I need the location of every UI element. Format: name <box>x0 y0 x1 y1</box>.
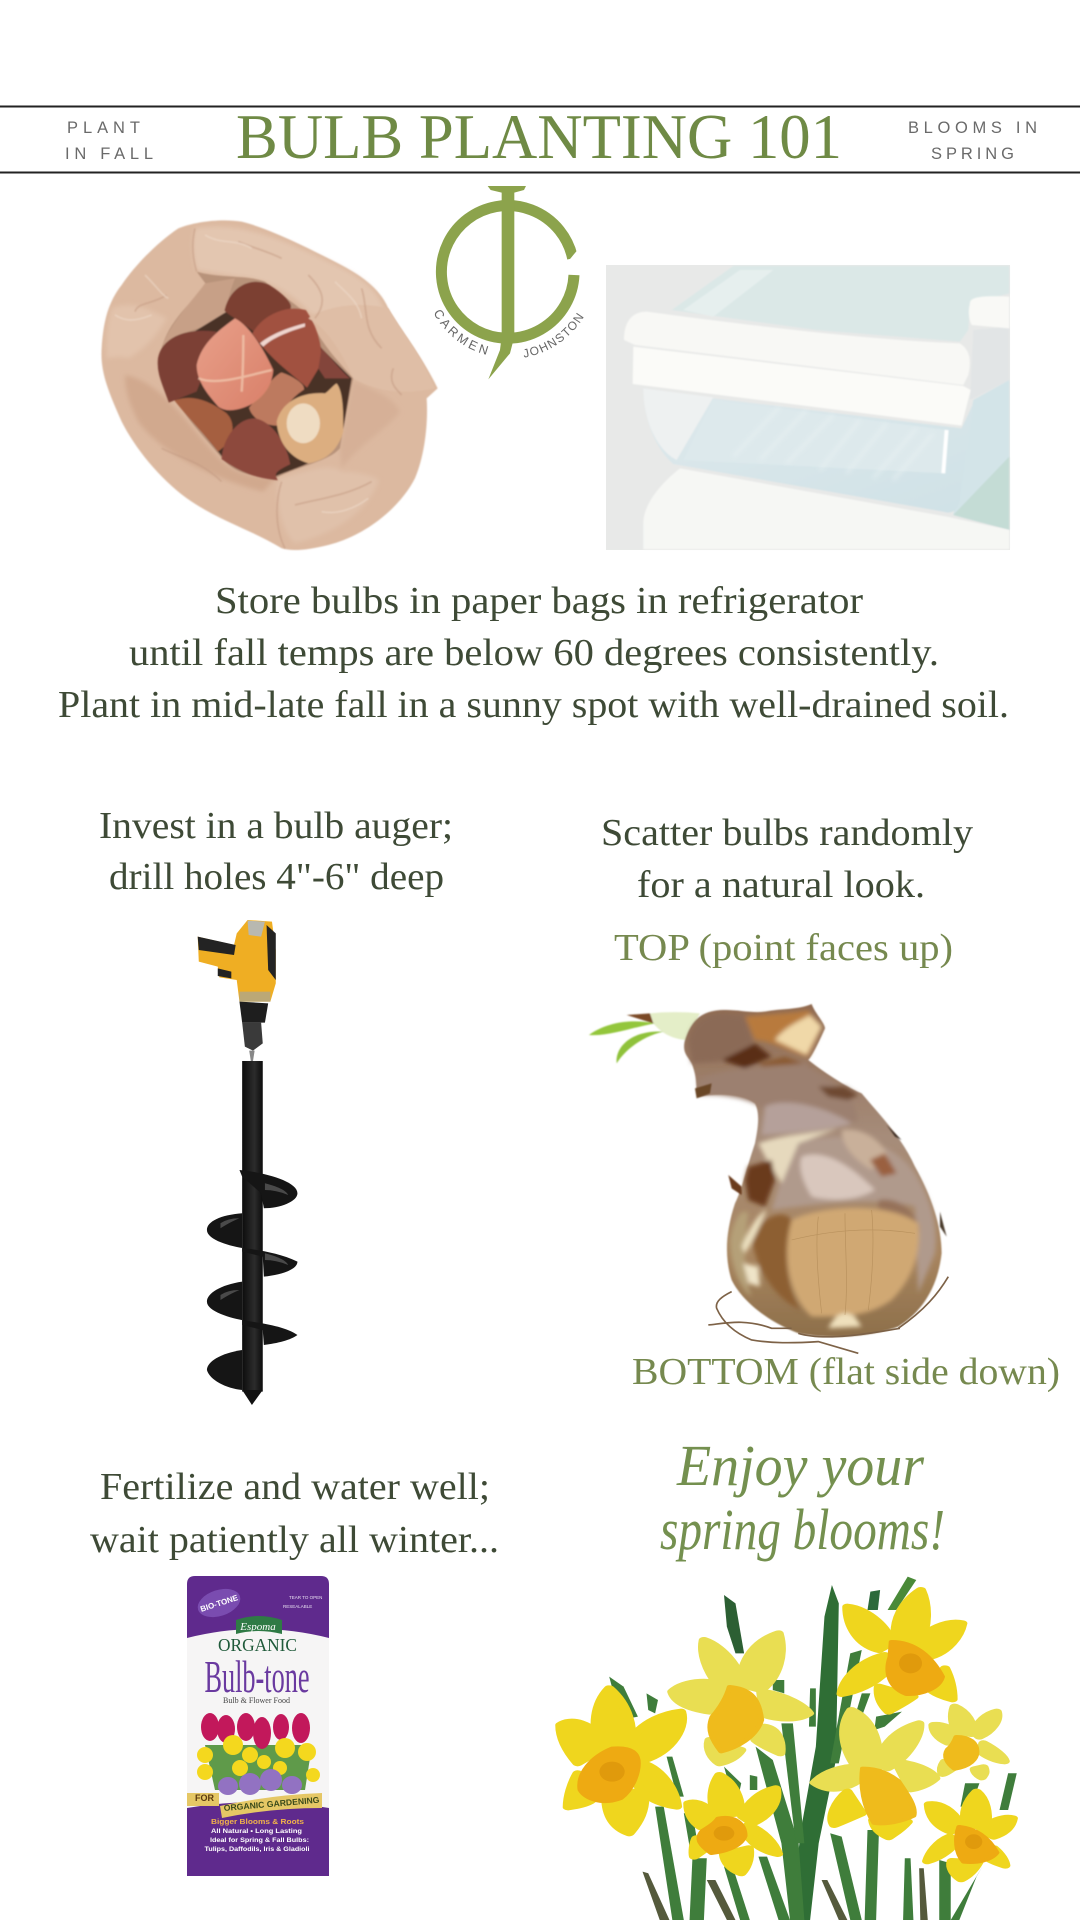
product name: ORGANIC <box>218 1635 297 1655</box>
paper flap <box>308 305 435 392</box>
photo: paper bag of bulbs <box>101 220 438 550</box>
auger instructions <box>99 805 453 898</box>
bag benefits: Bigger Blooms & Roots <box>211 1817 304 1826</box>
flower 4 <box>815 1710 935 1837</box>
brand shield <box>236 1616 282 1634</box>
photo: drill with bulb auger <box>198 920 297 1405</box>
bag banner <box>187 1793 322 1818</box>
bag banner: FOR <box>195 1793 214 1803</box>
flower 2 <box>672 1633 809 1763</box>
bag benefits: All Natural • Long Lasting <box>211 1828 302 1835</box>
logo: Carmen Johnston: CARMEN <box>434 310 488 355</box>
storage instructions: Store bulbs in paper bags in refrigerator <box>215 580 863 622</box>
badge: BIO-TONE <box>199 1593 240 1614</box>
left tagline <box>65 119 153 163</box>
right tagline: BLOOMS IN <box>908 119 1037 137</box>
auger instructions: drill holes 4"-6" deep <box>109 856 444 898</box>
bag banner: ORGANIC GARDENING <box>223 1795 320 1813</box>
reseal note: RESEALABLE <box>283 1604 312 1609</box>
brand shield: Espoma <box>239 1621 276 1633</box>
right tagline: SPRING <box>931 145 1014 163</box>
storage instructions <box>58 580 1009 726</box>
bag benefits: Tulips, Daffodils, Iris & Gladioli <box>204 1846 310 1853</box>
photo: refrigerator crisper drawer <box>606 265 1010 550</box>
product: Bulb-tone fertilizer bag: Bulb-tone <box>204 1651 310 1702</box>
script message: spring blooms! <box>660 1497 945 1562</box>
left tagline: IN FALL <box>65 145 153 163</box>
photo: daffodil bulb <box>589 1004 948 1353</box>
bag benefits: Ideal for Spring & Fall Bulbs: <box>210 1837 309 1844</box>
storage instructions: until fall temps are below 60 degrees consistently. <box>129 632 939 674</box>
storage instructions: Plant in mid-late fall in a sunny spot with well-drained soil. <box>58 684 1009 726</box>
title: BULB PLANTING 101 <box>236 101 842 172</box>
left tagline: PLANT <box>67 119 140 137</box>
photo: daffodils bouquet <box>560 1577 1017 1920</box>
bag benefits <box>204 1817 310 1853</box>
logo: Carmen Johnston: JOHNSTON <box>524 312 584 358</box>
scatter instructions: Scatter bulbs randomly <box>601 812 973 854</box>
scatter instructions <box>601 812 973 906</box>
flower 5 <box>934 1707 1005 1777</box>
fertilizer instructions: Fertilize and water well; <box>100 1466 490 1508</box>
script message <box>660 1433 945 1562</box>
flower 7 <box>927 1792 1013 1879</box>
scatter instructions: for a natural look. <box>637 864 925 906</box>
flower 3 <box>842 1590 962 1712</box>
reseal note: TEAR TO OPEN <box>289 1595 322 1600</box>
stems and leaves <box>609 1577 1017 1920</box>
reseal note <box>283 1595 322 1609</box>
auger instructions: Invest in a bulb auger; <box>99 805 453 847</box>
label: bulb bottom: BOTTOM (flat side down) <box>632 1351 1060 1393</box>
label: bulb top: TOP (point faces up) <box>614 927 953 969</box>
script message: Enjoy your <box>676 1433 924 1498</box>
product: Bulb-tone fertilizer bag <box>187 1576 329 1876</box>
bag flowers <box>197 1713 320 1795</box>
badge <box>194 1584 244 1622</box>
logo: Carmen Johnston <box>434 186 584 380</box>
fertilizer instructions: wait patiently all winter... <box>90 1519 499 1561</box>
bulbs <box>227 284 289 330</box>
flower 1 <box>560 1688 682 1833</box>
product: Bulb-tone fertilizer bag: Bulb & Flower Food <box>223 1695 291 1705</box>
header band <box>0 101 1080 174</box>
fertilizer instructions <box>90 1466 499 1561</box>
right tagline <box>908 119 1037 163</box>
flower 6 <box>688 1775 778 1873</box>
